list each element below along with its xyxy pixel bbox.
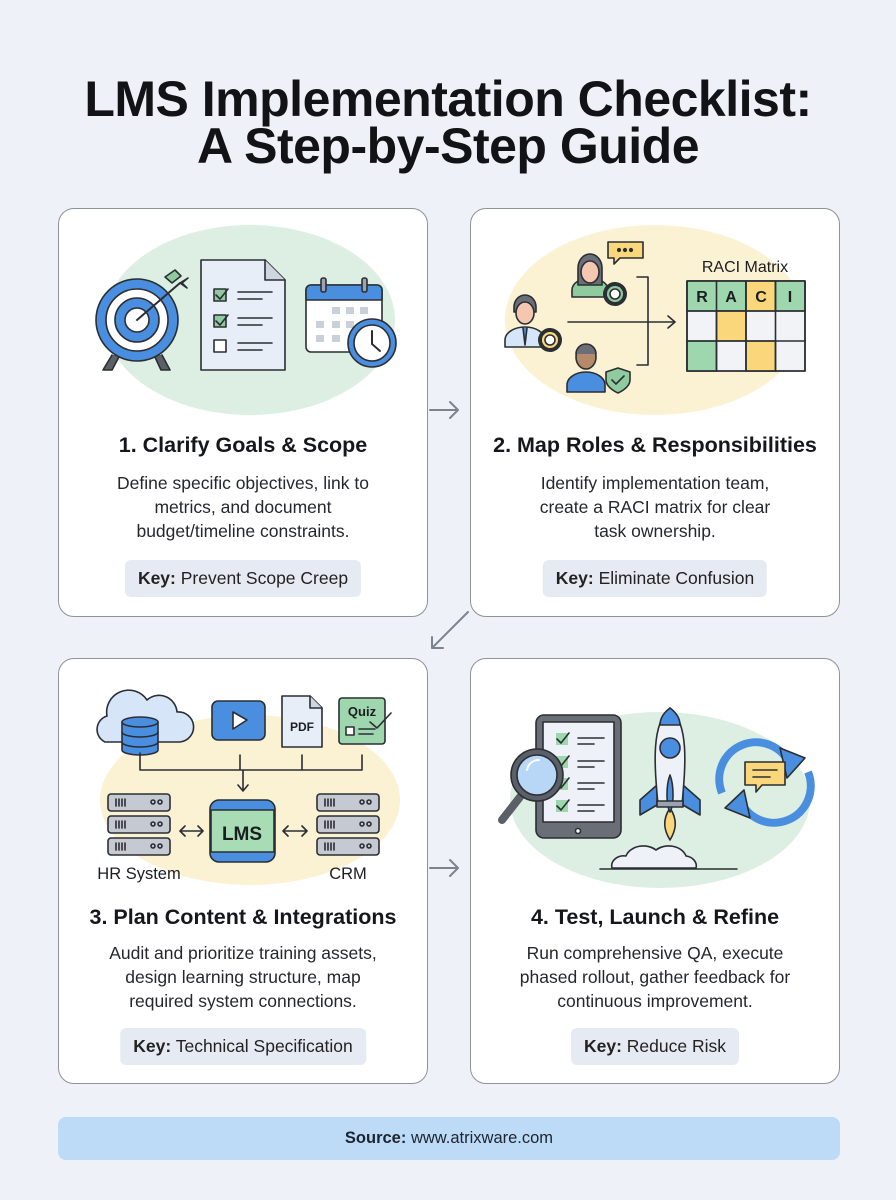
- heading: step 1: 1. Clarify Goals & Scope: [119, 433, 367, 457]
- text: step 4 description: [520, 943, 790, 1011]
- panel: step 1: [58, 208, 428, 617]
- labels: HR System / CRM: HR System: [97, 865, 181, 883]
- icon: LMS: [210, 800, 275, 862]
- source footer: [58, 1117, 840, 1160]
- text: step 3 description: design learning structure, map: [125, 967, 361, 987]
- icon: quiz: Quiz: [348, 704, 377, 719]
- text: step 2 description: Identify implementation team,: [541, 473, 769, 493]
- text: step 1 description: [117, 473, 369, 541]
- panel: step 4: [470, 658, 840, 1084]
- icon: PDF: [282, 696, 322, 747]
- illustration: step 4: [502, 708, 811, 888]
- icon: cloud database: [97, 690, 194, 755]
- chart: RACI grid: [687, 281, 805, 371]
- labels: HR System / CRM: [97, 865, 367, 883]
- icon: checklist document: [201, 260, 285, 370]
- text: step 4 description: phased rollout, gather feedback for: [520, 967, 790, 987]
- icon: HR server: [108, 794, 170, 855]
- arrows: two-way links: [180, 826, 307, 836]
- arrow: step 3 to 4: [430, 860, 458, 876]
- icon: bracket arrow: [568, 277, 675, 365]
- icon: video: [212, 701, 265, 740]
- heading: step 4: 4. Test, Launch & Refine: [531, 905, 779, 929]
- icon: LMS: LMS: [222, 824, 262, 845]
- icon: tablet checklist: [536, 715, 621, 838]
- icon: feedback cycle: [719, 742, 811, 823]
- icon: magnifier: [502, 749, 563, 820]
- title: [84, 71, 812, 174]
- heading: step 2: 2. Map Roles & Responsibilities: [493, 433, 817, 457]
- source footer: Source: www.atrixware.com: [345, 1129, 553, 1147]
- chart: RACI grid: R: [696, 289, 708, 306]
- text: step 3 description: [109, 943, 377, 1011]
- chart: RACI grid: I: [788, 289, 792, 306]
- arrow: step 2 to 3: [432, 612, 468, 648]
- panel: step 3: [58, 658, 428, 1084]
- text: step 4 description: continuous improvement.: [557, 991, 753, 1011]
- text: step 1 description: metrics, and document: [154, 497, 332, 517]
- key pill: step 4: Key: Reduce Risk: [584, 1036, 726, 1056]
- title: A Step-by-Step Guide: [197, 118, 699, 174]
- text: step 2 description: create a RACI matrix for clear: [540, 497, 770, 517]
- heading: step 3: 3. Plan Content & Integrations: [90, 905, 396, 929]
- text: step 1 description: budget/timeline constraints.: [136, 521, 350, 541]
- icon: calendar with clock: [306, 278, 396, 367]
- key pill: step 1: [125, 560, 361, 597]
- title: LMS Implementation Checklist:: [84, 71, 812, 127]
- illustration: step 1: [96, 225, 396, 415]
- key pill: step 4: [571, 1028, 739, 1065]
- chart: RACI grid: C: [755, 289, 767, 306]
- labels: HR System / CRM: CRM: [329, 865, 367, 883]
- label: RACI Matrix: RACI Matrix: [702, 259, 788, 276]
- icon: PDF: PDF: [290, 720, 314, 734]
- illustration: step 3: [97, 690, 400, 885]
- chart: RACI grid: A: [725, 289, 737, 306]
- key pill: step 1: Key: Prevent Scope Creep: [138, 568, 348, 588]
- key pill: step 2: Key: Eliminate Confusion: [556, 568, 754, 588]
- illustration: step 2: [505, 225, 805, 415]
- text: step 2 description: task ownership.: [594, 521, 716, 541]
- icon: rocket: [600, 708, 737, 869]
- key pill: step 3: [120, 1028, 366, 1065]
- icon: target: [96, 270, 188, 370]
- text: step 3 description: Audit and prioritize training assets,: [109, 943, 377, 963]
- text: step 3 description: required system connections.: [129, 991, 357, 1011]
- key pill: step 3: Key: Technical Specification: [133, 1036, 353, 1056]
- arrow: step 1 to 2: [430, 402, 458, 418]
- icon: CRM server: [317, 794, 379, 855]
- connectors: [140, 753, 362, 791]
- text: step 1 description: Define specific objectives, link to: [117, 473, 369, 493]
- text: step 2 description: [540, 473, 770, 541]
- text: step 4 description: Run comprehensive QA, execute: [527, 943, 783, 963]
- key pill: step 2: [543, 560, 767, 597]
- icon: team people: [505, 242, 643, 393]
- icon: quiz: [339, 698, 391, 744]
- panel: step 2: [470, 208, 840, 617]
